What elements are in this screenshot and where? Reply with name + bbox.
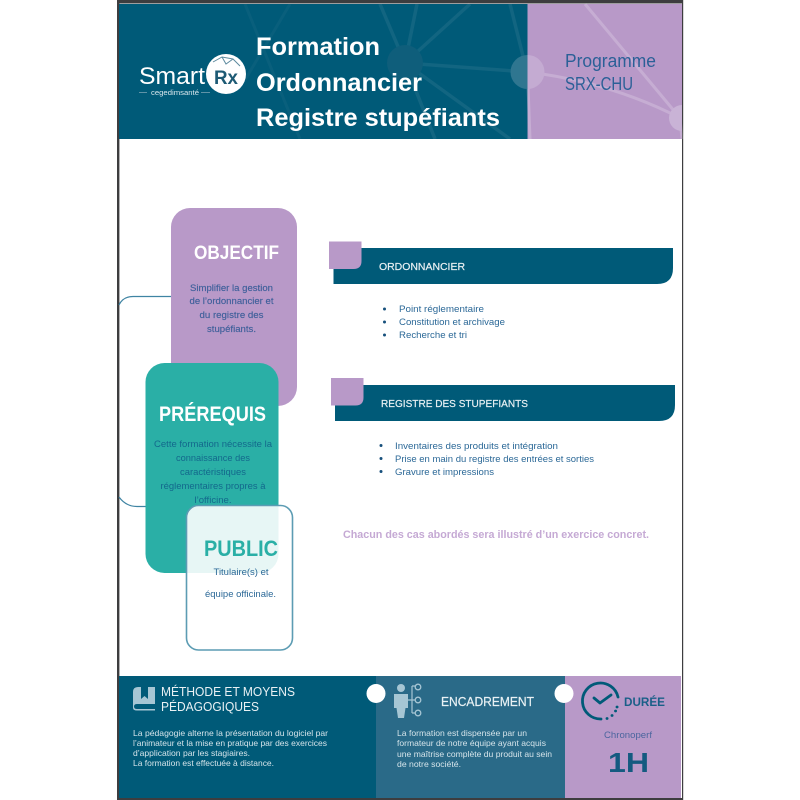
public text [205,567,276,600]
icon: book [133,687,155,710]
decorative node: left [366,684,386,703]
heading: durée: DURÉE [624,694,665,709]
méthode text: La formation est effectuée à distance. [133,758,274,768]
méthode text: La pédagogie alterne la présentation du logiciel par [133,728,328,738]
objectif text: Simplifier la gestion [190,283,273,294]
objectif text: du registre des [200,310,264,321]
section: registre des stupéfiants [331,378,675,478]
encadrement text: La formation est dispensée par un [397,728,527,738]
section: ordonnancier [329,242,673,341]
banner: ordonnancier: ORDONNANCIER [379,261,465,273]
public text: équipe officinale. [205,589,276,600]
duration value: 1H [608,747,649,778]
footer [119,676,681,798]
prérequis text [154,439,273,506]
prérequis text: caractéristiques [180,467,246,478]
list: registre: Gravure et impressions [395,467,494,478]
heading: encadrement: ENCADREMENT [441,695,534,709]
prérequis text: Cette formation nécessite la [154,439,273,450]
programme label: Programme [565,51,656,71]
encadrement text [397,728,552,769]
encadrement text: de notre société. [397,759,461,769]
exercise note: Chacun des cas abordés sera illustré d’un exercice concret. [343,529,649,541]
banner: registre [331,378,675,421]
list: registre: Inventaires des produits et intégration [395,441,558,452]
heading: public: PUBLIC [204,536,278,561]
prérequis text: connaissance des [176,453,250,464]
encadrement text: formateur de notre équipe ayant acquis [397,738,546,748]
panel: méthode [119,676,376,798]
heading: méthode: PÉDAGOGIQUES [161,699,259,714]
objectif text: stupéfiants. [207,324,256,335]
prérequis text: réglementaires propres à [160,481,266,492]
icon: clock [582,683,618,719]
list: ordonnancier: Point réglementaire [399,304,484,315]
list: registre: Prise en main du registre des entrées et sorties [395,454,594,465]
banner: registre: REGISTRE DES STUPEFIANTS [381,398,528,410]
header banner [119,4,682,139]
connector line [119,296,171,506]
panel: prérequis [146,363,278,573]
banner: ordonnancier [329,242,673,284]
list: ordonnancier: Recherche et tri [399,330,467,341]
title: Formation [256,33,380,61]
méthode text [133,728,328,768]
logo: SmartRx: Rx [214,68,238,89]
méthode text: d’application par les stagiaires. [133,748,250,758]
panel: objectif [171,208,297,406]
heading: méthode [161,684,295,714]
encadrement text: une maîtrise complète du produit au sein [397,749,552,759]
panel: public [186,506,292,650]
title: Ordonnancier [256,69,422,97]
heading: méthode: MÉTHODE ET MOYENS [161,684,295,699]
heading: objectif: OBJECTIF [194,243,279,264]
programme label: SRX-CHU [565,74,633,94]
programme label [565,51,656,94]
objectif text [190,283,274,335]
title [256,33,500,132]
public text: Titulaire(s) et [214,567,269,578]
chronoperf label: Chronoperf [604,730,653,740]
logo: SmartRx: cegedimsanté [151,90,199,97]
title: Registre stupéfiants [256,104,500,132]
list: registre [380,441,594,478]
prérequis text: l’officine. [194,495,232,506]
heading: prérequis: PRÉREQUIS [159,403,266,426]
méthode text: l’animateur et la mise en pratique par des exercices [133,738,327,748]
logo: SmartRx [139,54,246,97]
decorative node: right [554,684,574,703]
logo: SmartRx: Smart [139,63,205,90]
panel: encadrement [376,676,565,798]
list: ordonnancier [383,304,505,341]
panel: durée [565,676,681,798]
icon: person with nodes [394,684,421,718]
objectif text: de l’ordonnancier et [190,296,274,307]
list: ordonnancier: Constitution et archivage [399,317,505,328]
